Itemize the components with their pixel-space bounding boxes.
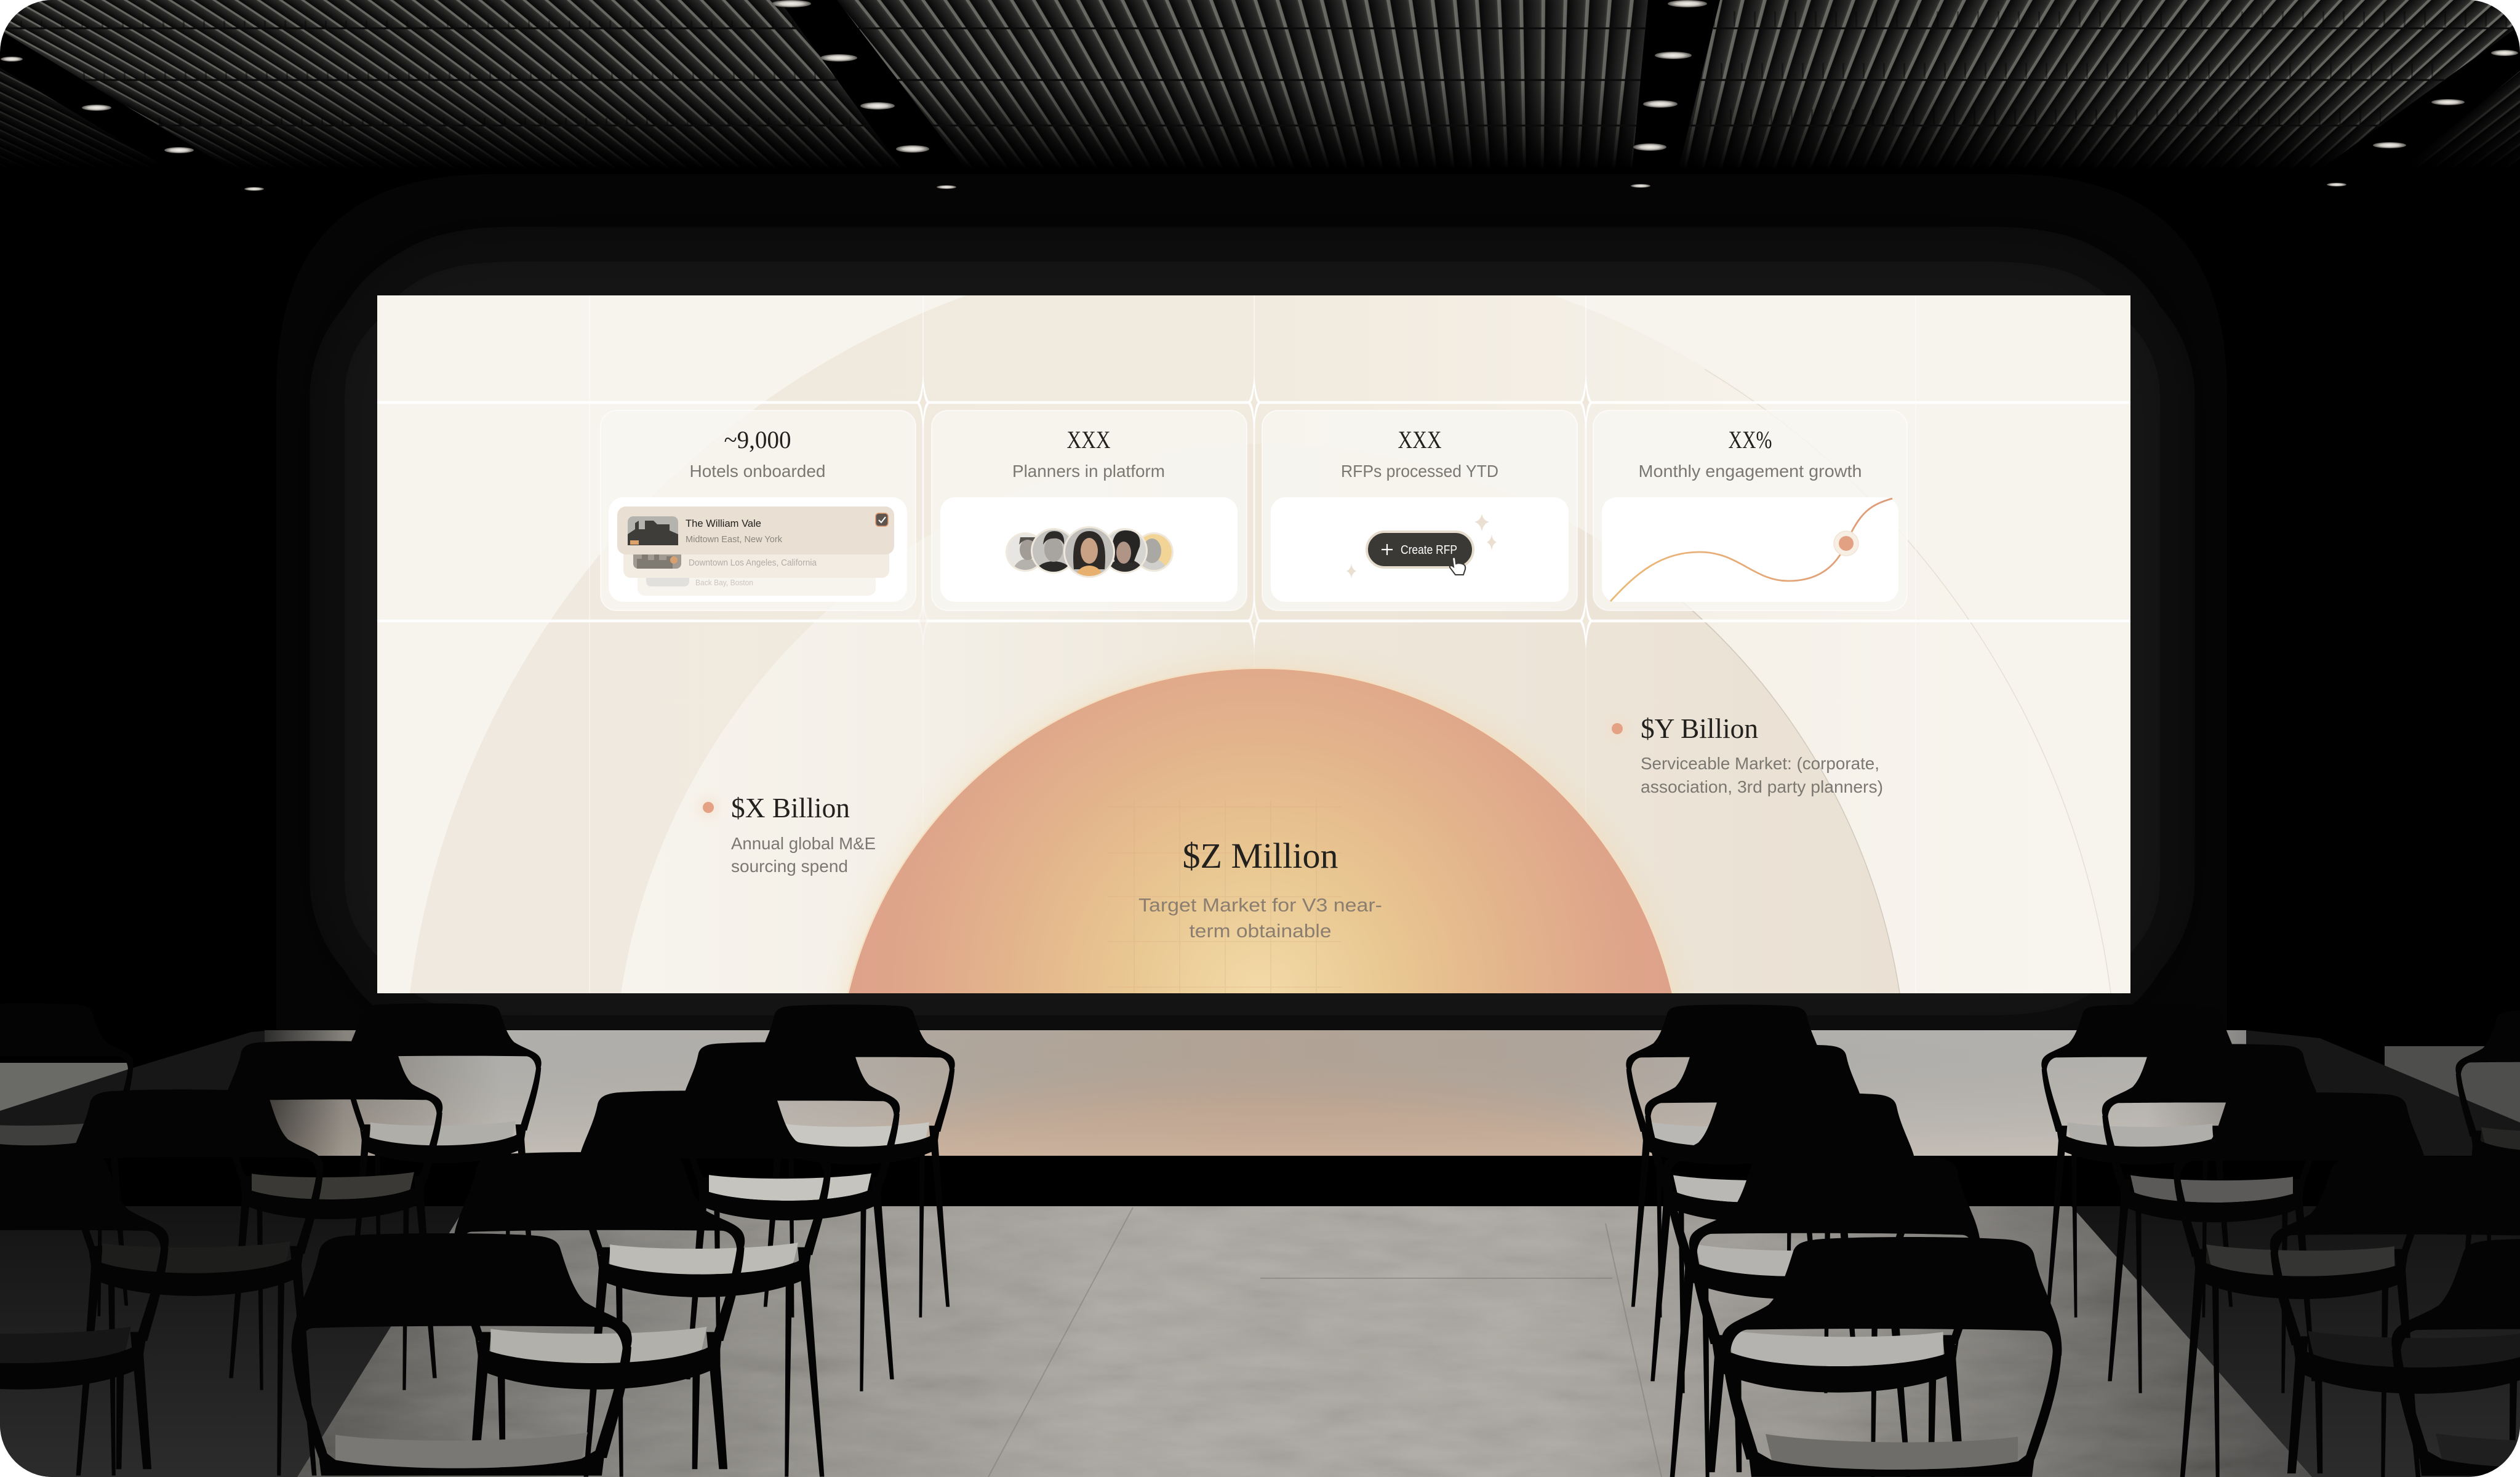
icon: hand cursor xyxy=(1450,558,1465,575)
inner market arc xyxy=(848,668,1673,993)
side platforms xyxy=(0,1030,2520,1156)
screen glow on the wall xyxy=(345,262,2160,1015)
screen background xyxy=(377,295,2130,993)
stat: planners: XXX xyxy=(1067,426,1111,454)
ceiling beams xyxy=(0,28,2516,126)
white panel xyxy=(1602,497,1898,602)
outer market arc xyxy=(410,295,1602,993)
callout: $X Billion: Annual global M&E xyxy=(731,834,876,853)
white panel xyxy=(1271,497,1569,602)
stat: hotels: ~9,000 xyxy=(724,426,791,454)
avatar 2 xyxy=(1028,526,1080,586)
hotel location: Midtown East, New York xyxy=(686,534,782,545)
card: hotels onboarded xyxy=(601,410,916,610)
hotel row 3: Back Bay, Boston xyxy=(695,578,753,587)
callout: $X Billion: sourcing spend xyxy=(731,857,848,876)
card: engagement xyxy=(1593,410,1907,610)
screen xyxy=(377,295,2130,993)
icon: selected check xyxy=(876,513,888,526)
stat: engagement: XX% xyxy=(1728,426,1772,454)
right panel slat ticks xyxy=(1689,19,2516,117)
button: create RFP xyxy=(1367,532,1473,567)
dim outer ceiling strips xyxy=(0,68,2520,175)
card: planners xyxy=(932,410,1247,610)
chairs: right group xyxy=(1626,1004,2520,1477)
callout: $Z Million: $Z Million xyxy=(1183,836,1338,876)
callout: $Z Million: term obtainable xyxy=(1189,920,1332,942)
icon: sparkles xyxy=(1346,514,1497,578)
grid sparkles xyxy=(916,374,1593,649)
stat: RFPs: XXX xyxy=(1398,426,1442,454)
button: create RFP: Create RFP xyxy=(1401,543,1457,557)
ceiling fade to black xyxy=(0,0,2520,178)
avatars xyxy=(1003,526,1175,590)
hotel row 2: Downtown Los Angeles, California xyxy=(689,558,817,568)
ceiling spot lights xyxy=(1,0,2518,153)
card: RFPs xyxy=(1262,410,1577,610)
inner market glow xyxy=(844,665,1677,1059)
label: hotels: Hotels onboarded xyxy=(689,462,826,481)
hotel row 3 xyxy=(638,569,876,596)
label: engagement: Monthly engagement growth xyxy=(1638,462,1862,481)
avatar 5 xyxy=(1132,529,1175,586)
small wall lights xyxy=(244,183,2346,191)
white panel xyxy=(940,497,1238,602)
callout: $X Billion xyxy=(697,792,876,876)
callout: $X Billion: $X Billion xyxy=(731,792,850,823)
avatar 3 xyxy=(1062,526,1117,590)
avatar 4 xyxy=(1102,526,1151,588)
label: planners: Planners in platform xyxy=(1012,462,1165,481)
arched wall niche behind the screen xyxy=(276,174,2227,1046)
callout: $Y Billion: $Y Billion xyxy=(1641,713,1758,744)
concrete floor xyxy=(0,1206,2520,1477)
callout: $Y Billion xyxy=(1606,713,1883,796)
hotel row 2 xyxy=(623,545,889,578)
wall band below the screen xyxy=(0,1030,2520,1225)
ceiling slat ticks above beams xyxy=(0,25,870,122)
middle market arc xyxy=(621,444,1900,993)
callout: $Z Million: Target Market for V3 near- xyxy=(1138,894,1382,916)
callout: $Y Billion: association, 3rd party planners) xyxy=(1641,777,1883,796)
hotel row 1 xyxy=(617,506,894,554)
chairs: left group xyxy=(0,1003,955,1477)
black skirting strip xyxy=(0,1156,2520,1206)
wall background xyxy=(0,175,2520,1037)
avatar 1 xyxy=(1003,529,1046,586)
hotel name: The William Vale xyxy=(686,518,761,529)
callout: $Z Million xyxy=(1138,836,1382,942)
white panel xyxy=(609,497,907,602)
ceiling slat panels xyxy=(0,0,2520,164)
line chart xyxy=(1610,498,1892,601)
callout: $Y Billion: Serviceable Market: (corporate, xyxy=(1641,754,1879,773)
label: RFPs: RFPs processed YTD xyxy=(1341,462,1498,481)
